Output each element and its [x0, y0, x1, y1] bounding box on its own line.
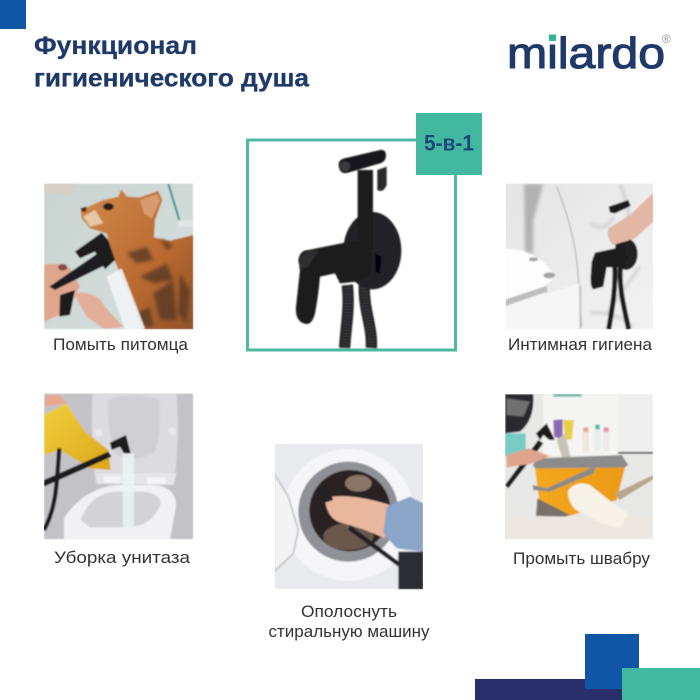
decorative blocks: bottom right: [475, 634, 700, 700]
corner square: top left: [0, 0, 26, 29]
title: гигиенического душа: [34, 64, 310, 92]
caption: washing machine: стиральную машину: [268, 623, 430, 641]
badge: 5-в-1: 5-в-1: [424, 130, 474, 156]
title: [34, 32, 310, 92]
title: Функционал: [34, 32, 197, 60]
logo: milardo: ®: [662, 32, 671, 46]
caption: mop: Промыть швабру: [513, 550, 651, 568]
caption: pet: Помыть питомца: [53, 336, 189, 354]
caption: toilet: Уборка унитаза: [54, 549, 191, 567]
caption: washing machine: Ополоснуть: [301, 603, 397, 621]
photo: washing machine: [274, 443, 423, 589]
logo: milardo: milardo: [507, 29, 665, 78]
caption: intimate hygiene: Интимная гигиена: [508, 336, 653, 354]
photo: cat being washed: [44, 183, 193, 329]
photo: rinsing mop: [504, 393, 653, 539]
caption: washing machine: [268, 603, 430, 641]
panel: product frame: [248, 140, 456, 350]
photo: intimate hygiene: [504, 183, 653, 329]
icon: black hygienic shower mixer: [296, 150, 401, 348]
photo: cleaning toilet: [44, 393, 193, 539]
badge: 5-в-1: [416, 113, 482, 175]
